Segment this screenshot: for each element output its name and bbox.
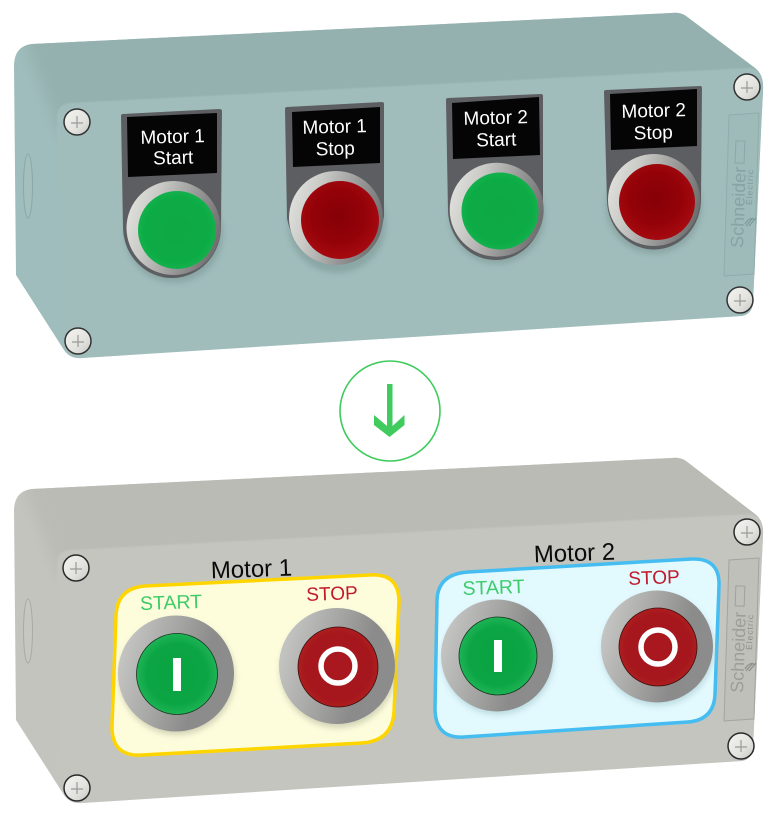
O symbol [641,630,675,664]
label text: Start [476,129,517,152]
bottom enclosure: redesigned grouped station [14,435,780,803]
button 3: Motor 2 Start [446,94,545,264]
label text: Stop [315,138,355,161]
mounting plate [285,102,384,261]
bezel [450,163,544,257]
bezel [601,590,713,702]
shadow [119,619,235,735]
STOP label: STOP [628,567,680,590]
cable gland knockout [24,154,32,218]
mounting plate [121,109,222,278]
brand mark [745,218,756,226]
brand plate [724,558,759,721]
green push button [462,172,538,250]
shadow [125,185,223,283]
red face [298,627,378,707]
top enclosure: original four-button station [14,0,780,358]
O symbol [321,649,355,683]
screw: lower right [728,733,754,759]
bezel [441,600,553,712]
button 2: Motor 1 Stop [285,102,386,273]
shadow [288,175,386,273]
plate outline [724,558,759,721]
yellow group background [112,575,399,755]
green face [459,617,537,695]
bezel [279,608,395,724]
mounting plate [446,94,543,260]
shadow [280,612,396,728]
label text: Stop [633,122,673,145]
label [127,113,217,177]
label [292,107,380,167]
bezel [118,616,234,732]
shadow [602,594,714,706]
brand name: Schneider [727,166,750,248]
label text: Motor 1 [140,126,205,149]
brand plate [724,113,759,276]
screw: upper right [734,74,760,100]
bezel [126,181,220,275]
screw: upper left [64,109,90,135]
bezel [289,171,383,265]
red push button [301,181,379,259]
brand sub-name: Electric [744,614,755,650]
mounting plate [604,86,702,250]
green push button [138,191,216,269]
stop button [279,608,396,728]
I symbol [173,658,181,691]
logo box [735,141,745,163]
label [610,89,697,150]
shadow [606,158,702,254]
start button [118,616,235,735]
shadow [449,168,545,264]
screw: lower right [727,287,753,313]
enclosure body silhouette [14,458,763,803]
label text: Start [153,147,194,170]
Motor 2 heading: Motor 2 [533,539,616,568]
button 4: Motor 2 Stop [604,86,702,254]
Motor 1 heading: Motor 1 [210,555,293,584]
cable gland knockout [24,599,32,663]
screw: upper right [734,519,760,545]
screw: upper left [63,555,89,581]
arrow in circle [340,361,440,461]
red push button [619,164,695,240]
label text: Motor 2 [463,107,528,130]
bezel [608,154,700,246]
logo box [735,586,745,606]
brand mark [745,663,756,671]
enclosure top face [16,0,780,358]
green face [136,634,218,714]
red face [619,608,697,686]
label text: Motor 2 [621,100,686,123]
button 1: Motor 1 Start [121,109,223,283]
panel: Motor 2 group [435,559,719,737]
brand name: Schneider [727,611,750,693]
start button [441,600,554,715]
STOP label: STOP [306,583,358,606]
START label: START [462,576,525,600]
label [452,97,540,159]
START label: START [140,591,203,615]
screw: lower left [65,328,91,354]
plate outline [724,113,759,276]
stop button [601,590,714,706]
shadow [442,603,554,715]
panel: Motor 1 group [112,575,399,755]
I symbol [494,640,502,672]
screw: lower left [64,775,90,801]
brand sub-name: Electric [744,169,755,205]
enclosure body silhouette [14,13,763,358]
enclosure top face [25,458,764,792]
label text: Motor 1 [302,116,367,139]
blue group background [435,559,719,737]
